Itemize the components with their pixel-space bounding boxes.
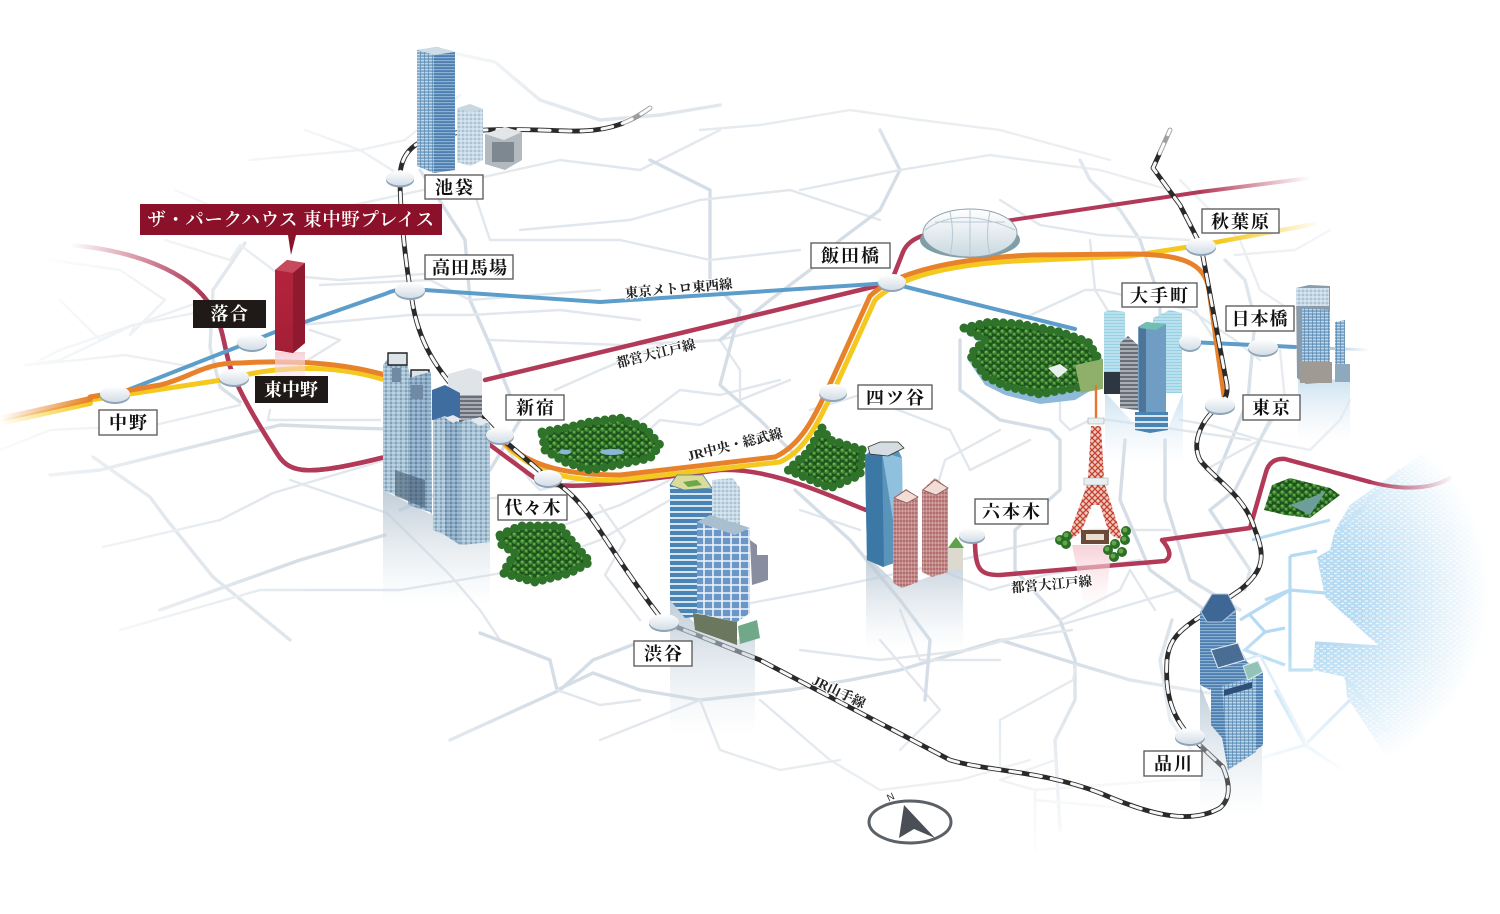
line: Tozai [115,283,1295,395]
label: Ikebukuro: 池袋 [435,178,475,198]
label: Ikebukuro [425,175,483,199]
building: Tokyo Dome [920,209,1020,258]
label: Ochiai: 落合 [210,304,250,324]
park: Shinjuku Gyoen [542,418,660,470]
label: Nakano: 中野 [109,413,149,433]
line: Chuo orange [90,254,1224,475]
compass [869,791,951,843]
label: Yoyogi: 代々木 [504,498,562,518]
label: Yoyogi [498,495,567,520]
line: Toei Oedo (Korakuen to Ueno) [1005,178,1310,221]
label: Tokyo: 東京 [1252,397,1292,418]
building: Roppongi residence towers [893,478,964,588]
line ends fading out [625,107,1171,152]
line label: Chuo-Sobu: JR中央・総武線 [686,424,785,464]
line label: Tozai: 東京メトロ東西線 [624,275,734,301]
label: Shinagawa [1144,751,1202,776]
label: Iidabashi [811,243,890,268]
label: Nakano [99,410,157,435]
label: Nihonbashi [1226,306,1294,331]
reflection shadows under buildings [275,352,1350,815]
label: Otemachi: 大手町 [1130,286,1190,306]
label: Roppongi: 六本木 [982,502,1042,522]
compass: N [885,791,897,804]
line label: Oedo south: 都営大江戸線 [1011,572,1093,596]
water: Tokyo bay [1239,459,1475,762]
label: Yotsuya: 四ツ谷 [866,388,926,408]
label: Shinjuku: 新宿 [516,398,556,418]
line: Chuo-Sobu yellow [90,245,1201,480]
park: Hamarikyu [1264,478,1340,518]
line: west fade of Chuo [0,399,90,423]
building: Nihonbashi towers [1296,285,1350,384]
line: Tozai fade [1295,347,1370,350]
label: Akihabara [1202,209,1279,233]
road network [0,50,1350,860]
callout: property name [140,204,442,255]
label: Shibuya: 渋谷 [644,644,684,664]
label: Higashinakano [255,376,328,403]
park: Yoyogi [500,526,590,582]
station markers [100,170,1278,746]
label: Nihonbashi: 日本橋 [1232,308,1288,329]
park: Akasaka Palace [788,428,863,488]
callout: property name: ザ・パークハウス 東中野プレイス [147,209,435,231]
line: Chuo yellow east fade [1201,223,1320,245]
label: Shinagawa: 品川 [1154,754,1194,774]
line: Toei Oedo (north-east) [890,235,925,285]
building: Ikebukuro Sunshine 60 [417,47,522,173]
label: Tokyo [1243,395,1300,420]
building: The Parkhouse Higashinakano Place [275,260,305,353]
label: Shibuya [634,641,692,666]
label: Shinjuku [506,395,564,420]
building: Shinagawa towers [1200,594,1263,770]
park: Imperial Palace [962,320,1103,404]
label: Otemachi [1122,283,1197,307]
line: Toei Oedo (Roppongi to bay) [975,459,1370,575]
landmark: Tokyo Tower [1055,385,1131,562]
label: Iidabashi: 飯田橋 [821,245,881,266]
label: Akihabara: 秋葉原 [1211,212,1271,232]
label: Yotsuya [858,385,932,409]
line: Toei Oedo bay fade [1370,478,1450,488]
line: JR Yamanote [400,108,1261,817]
label: Higashinakano: 東中野 [264,380,318,400]
line: Toei Oedo (west loop) [70,245,885,510]
building: Shibuya Scramble [670,475,768,645]
building: Roppongi Hills [865,442,904,567]
line label: Oedo north: 都営大江戸線 [615,335,698,371]
label: Takadanobaba: 高田馬場 [432,258,508,278]
building: Tokyo Metropolitan Government [383,353,490,545]
building: Otemachi towers [1104,310,1182,433]
label: Roppongi [975,499,1048,524]
line label: Yamanote: JR山手線 [810,672,869,711]
label: Ochiai [193,300,266,328]
